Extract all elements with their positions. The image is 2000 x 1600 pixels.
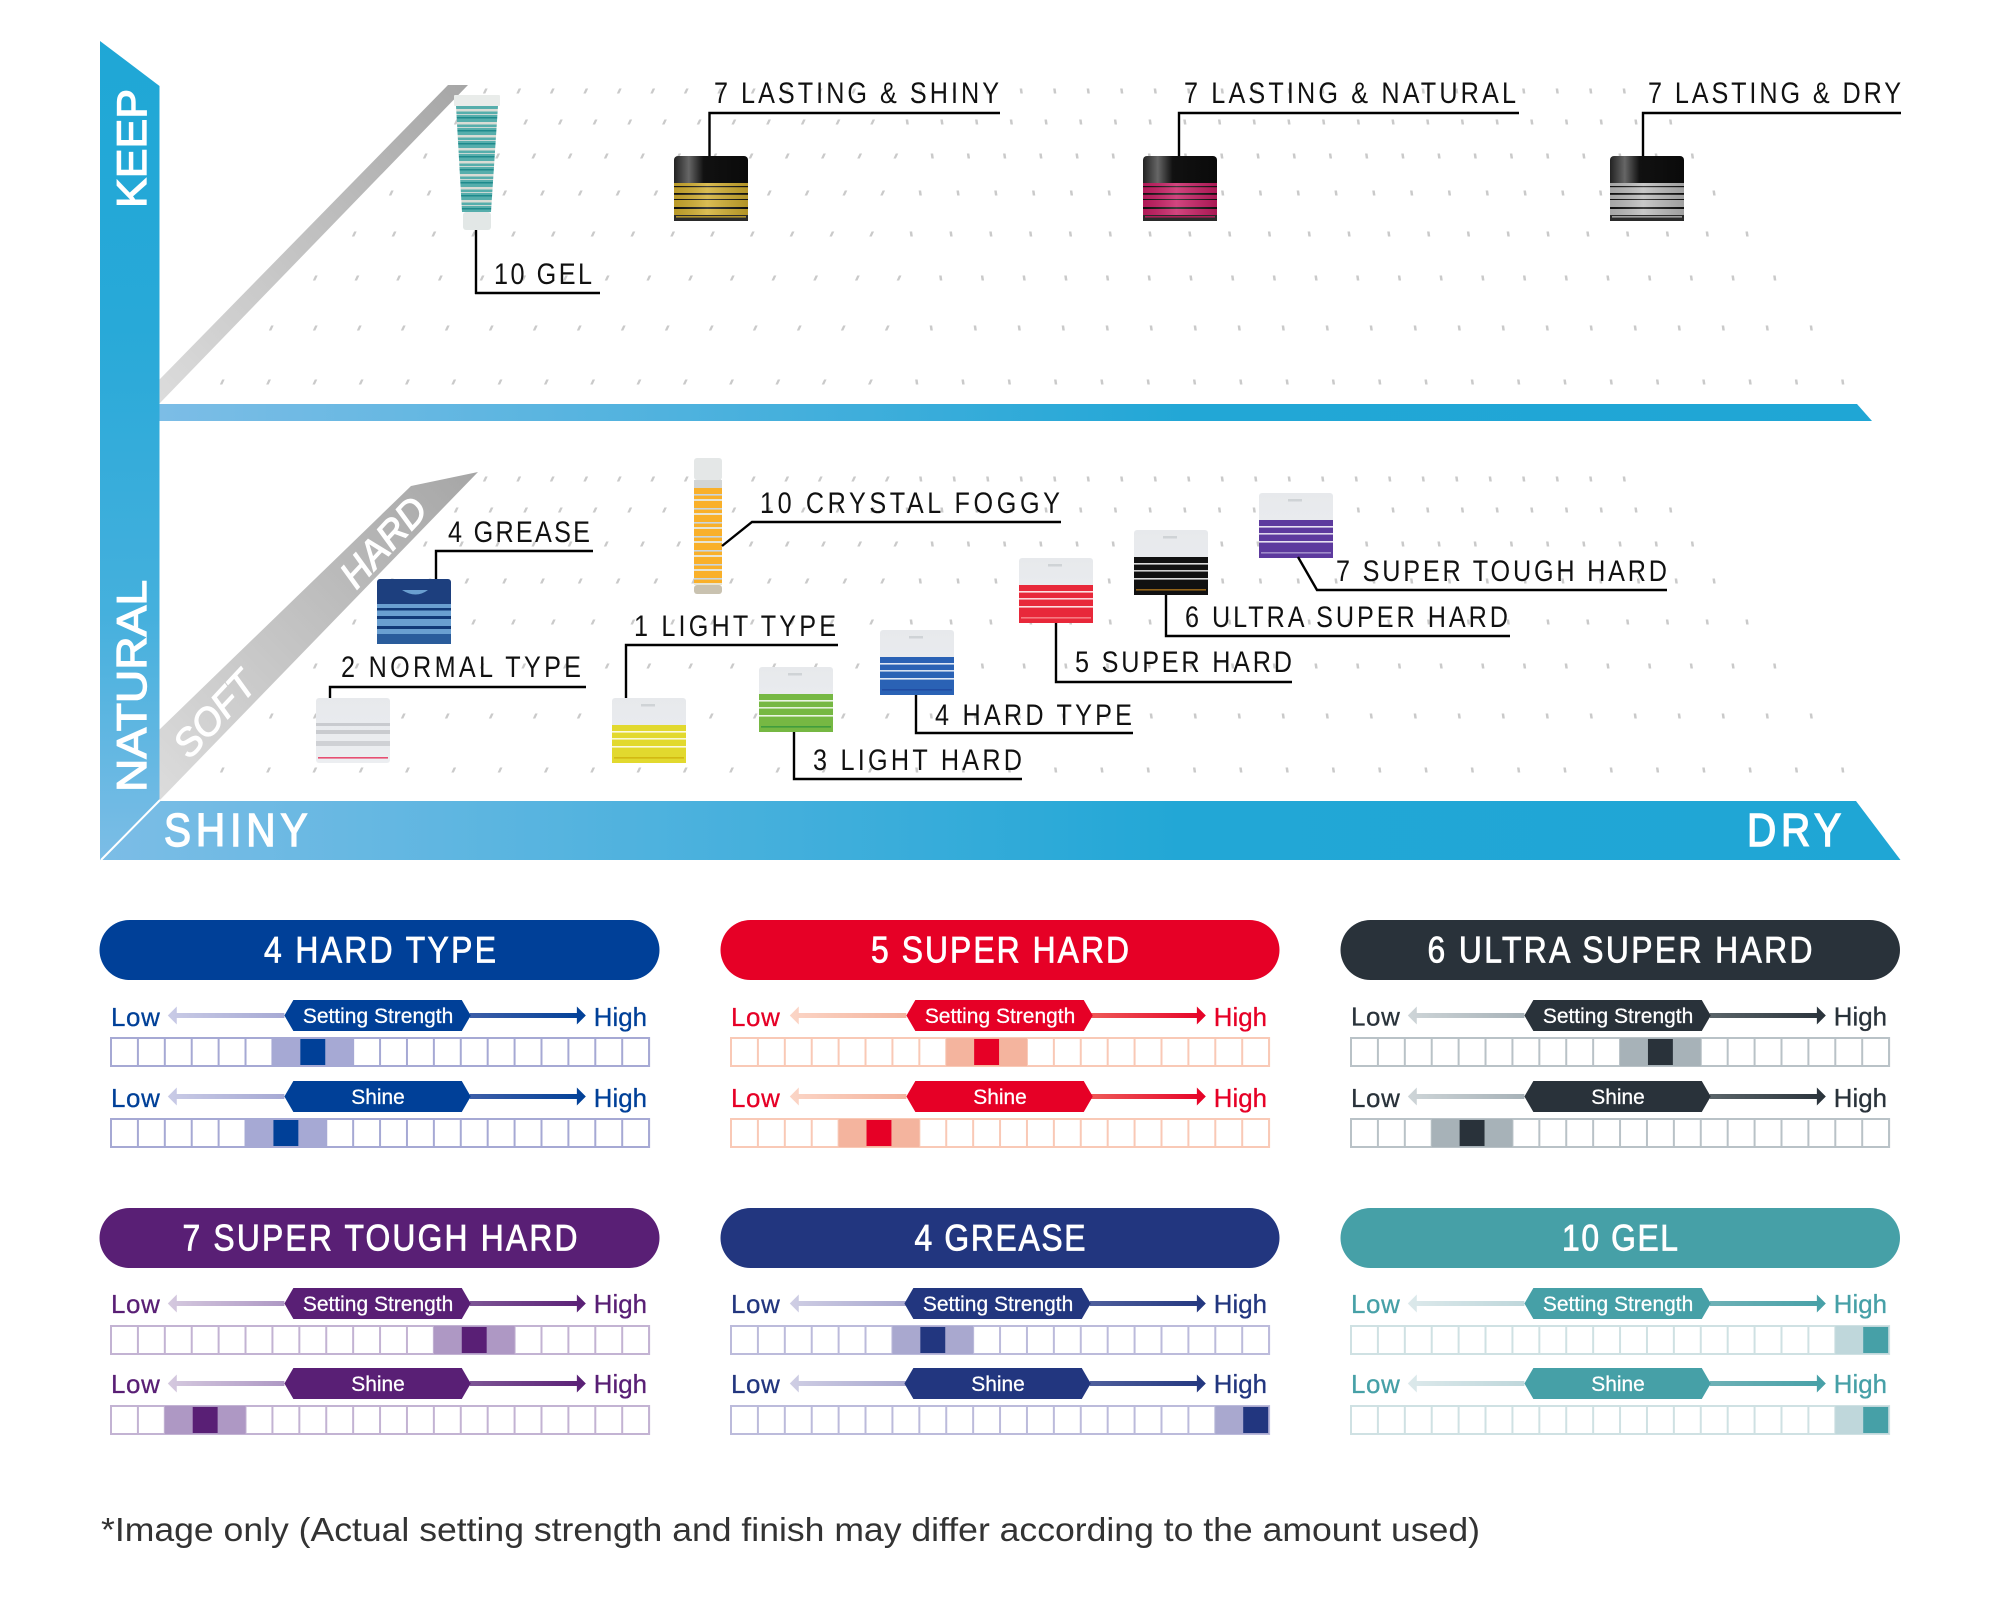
product: 4 grease: [377, 515, 593, 644]
panel: 7 super tough hard: [100, 1208, 660, 1434]
meter: shine: High: [1834, 1085, 1887, 1113]
meter: setting strength: [1350, 1288, 1889, 1354]
product: 3 light hard: [759, 667, 1022, 779]
label: 10 GEL: [494, 257, 592, 290]
axis label: keep: KEEP: [108, 89, 155, 208]
product: 7 lasting and natural: [1143, 76, 1519, 221]
label: 4 HARD TYPE: [935, 698, 1132, 731]
horizontal axis: shiny to dry: [100, 800, 1900, 860]
product: 7 super tough hard: [1259, 493, 1667, 590]
label: 3 LIGHT HARD: [813, 743, 1022, 776]
panel title: 10 GEL: [1562, 1218, 1678, 1259]
panel: 5 super hard: [720, 920, 1280, 1147]
meter: setting strength: [730, 1000, 1269, 1066]
vertical axis: keep to natural: [100, 41, 160, 860]
product: 10 gel tube: [454, 95, 600, 294]
meter: shine: Low: [111, 1085, 160, 1113]
label: hard: HARD: [332, 489, 436, 597]
product: 10 crystal foggy spray: [694, 458, 1061, 594]
meter: shine: Low: [1351, 1085, 1400, 1113]
meter: setting strength: Low: [1351, 1291, 1400, 1319]
label: 7 LASTING & DRY: [1648, 76, 1901, 109]
meter: shine: Shine: [973, 1086, 1027, 1109]
product: 7 lasting and shiny: [674, 76, 1000, 221]
product: 5 super hard: [1019, 558, 1292, 682]
meter: shine: High: [1214, 1085, 1267, 1113]
meter: setting strength: High: [1214, 1004, 1267, 1032]
label: 7 SUPER TOUGH HARD: [1336, 554, 1667, 587]
meter: setting strength: Setting Strength: [923, 1293, 1073, 1316]
meter: shine: [1350, 1368, 1889, 1434]
meter: shine: [110, 1081, 649, 1147]
meter: shine: [110, 1368, 649, 1434]
meter: setting strength: High: [594, 1291, 647, 1319]
meter: shine: [1350, 1081, 1889, 1147]
footnote: *Image only (Actual setting strength and finish may differ according to the amount used): [101, 1511, 1480, 1548]
panel title: 4 GREASE: [915, 1218, 1085, 1259]
axis label: shiny: SHINY: [164, 806, 307, 857]
label: 4 GREASE: [448, 515, 590, 548]
meter: setting strength: Setting Strength: [925, 1005, 1075, 1028]
product: 4 hard type: [880, 630, 1133, 733]
diagonal axis: keep chart: [159, 85, 468, 404]
meter: shine: Low: [111, 1371, 160, 1399]
dotted perspective grid: natural chart: [221, 479, 1846, 770]
axis label: natural: NATURAL: [108, 580, 155, 792]
panel: 10 gel: [1340, 1208, 1900, 1434]
label: 7 LASTING & NATURAL: [1184, 76, 1516, 109]
panel title: 7 SUPER TOUGH HARD: [183, 1218, 577, 1259]
meter: shine: Low: [731, 1085, 780, 1113]
meter: setting strength: Low: [731, 1291, 780, 1319]
axis label: dry: DRY: [1747, 806, 1841, 857]
meter: shine: [730, 1368, 1269, 1434]
meter: setting strength: Setting Strength: [303, 1293, 453, 1316]
meter: shine: High: [1834, 1371, 1887, 1399]
meter: shine: High: [1214, 1371, 1267, 1399]
meter: setting strength: Low: [1351, 1003, 1400, 1032]
panel: 6 ultra super hard: [1340, 920, 1900, 1147]
panel title: 5 SUPER HARD: [871, 930, 1129, 971]
meter: setting strength: [110, 1288, 649, 1354]
meter: setting strength: Low: [111, 1291, 160, 1319]
label: 5 SUPER HARD: [1075, 645, 1292, 678]
label: soft: SOFT: [165, 661, 267, 766]
product: 6 ultra super hard: [1134, 530, 1510, 636]
product: 2 normal type: [316, 650, 586, 763]
panel title: 6 ULTRA SUPER HARD: [1427, 930, 1813, 971]
label: 2 NORMAL TYPE: [341, 650, 581, 683]
panel title: 4 HARD TYPE: [264, 930, 496, 971]
meter: shine: High: [594, 1371, 647, 1399]
meter: shine: Low: [731, 1371, 780, 1399]
panel: 4 hard type: [100, 920, 660, 1147]
dotted perspective grid: keep chart: [221, 91, 1846, 382]
product: 7 lasting and dry: [1610, 76, 1901, 221]
meter: setting strength: High: [1214, 1291, 1267, 1319]
meter: shine: Shine: [351, 1086, 405, 1109]
meter: shine: Shine: [1591, 1086, 1645, 1109]
label: 7 LASTING & SHINY: [714, 76, 999, 109]
meter: setting strength: Low: [111, 1004, 160, 1032]
meter: setting strength: High: [1834, 1003, 1887, 1032]
product: 1 light type: [612, 609, 838, 763]
meter: setting strength: [730, 1288, 1269, 1354]
meter: setting strength: Setting Strength: [303, 1005, 453, 1028]
meter: setting strength: Setting Strength: [1543, 1293, 1693, 1316]
meter: setting strength: High: [1834, 1291, 1887, 1319]
meter: shine: Shine: [1591, 1373, 1645, 1396]
meter: shine: Shine: [351, 1373, 405, 1396]
middle horizontal band: [159, 404, 1872, 421]
meter: shine: High: [594, 1085, 647, 1113]
meter: shine: Shine: [971, 1373, 1025, 1396]
diagonal axis: soft to hard: [159, 472, 478, 801]
meter: setting strength: Setting Strength: [1543, 1005, 1693, 1028]
meter: setting strength: [110, 1000, 649, 1066]
meter: shine: [730, 1081, 1269, 1147]
label: 10 CRYSTAL FOGGY: [760, 486, 1060, 519]
label: 1 LIGHT TYPE: [634, 609, 836, 642]
meter: setting strength: [1350, 1000, 1889, 1066]
panel: 4 grease: [720, 1208, 1280, 1434]
meter: setting strength: High: [594, 1004, 647, 1032]
meter: setting strength: Low: [731, 1004, 780, 1032]
label: 6 ULTRA SUPER HARD: [1185, 600, 1508, 633]
meter: shine: Low: [1351, 1371, 1400, 1399]
